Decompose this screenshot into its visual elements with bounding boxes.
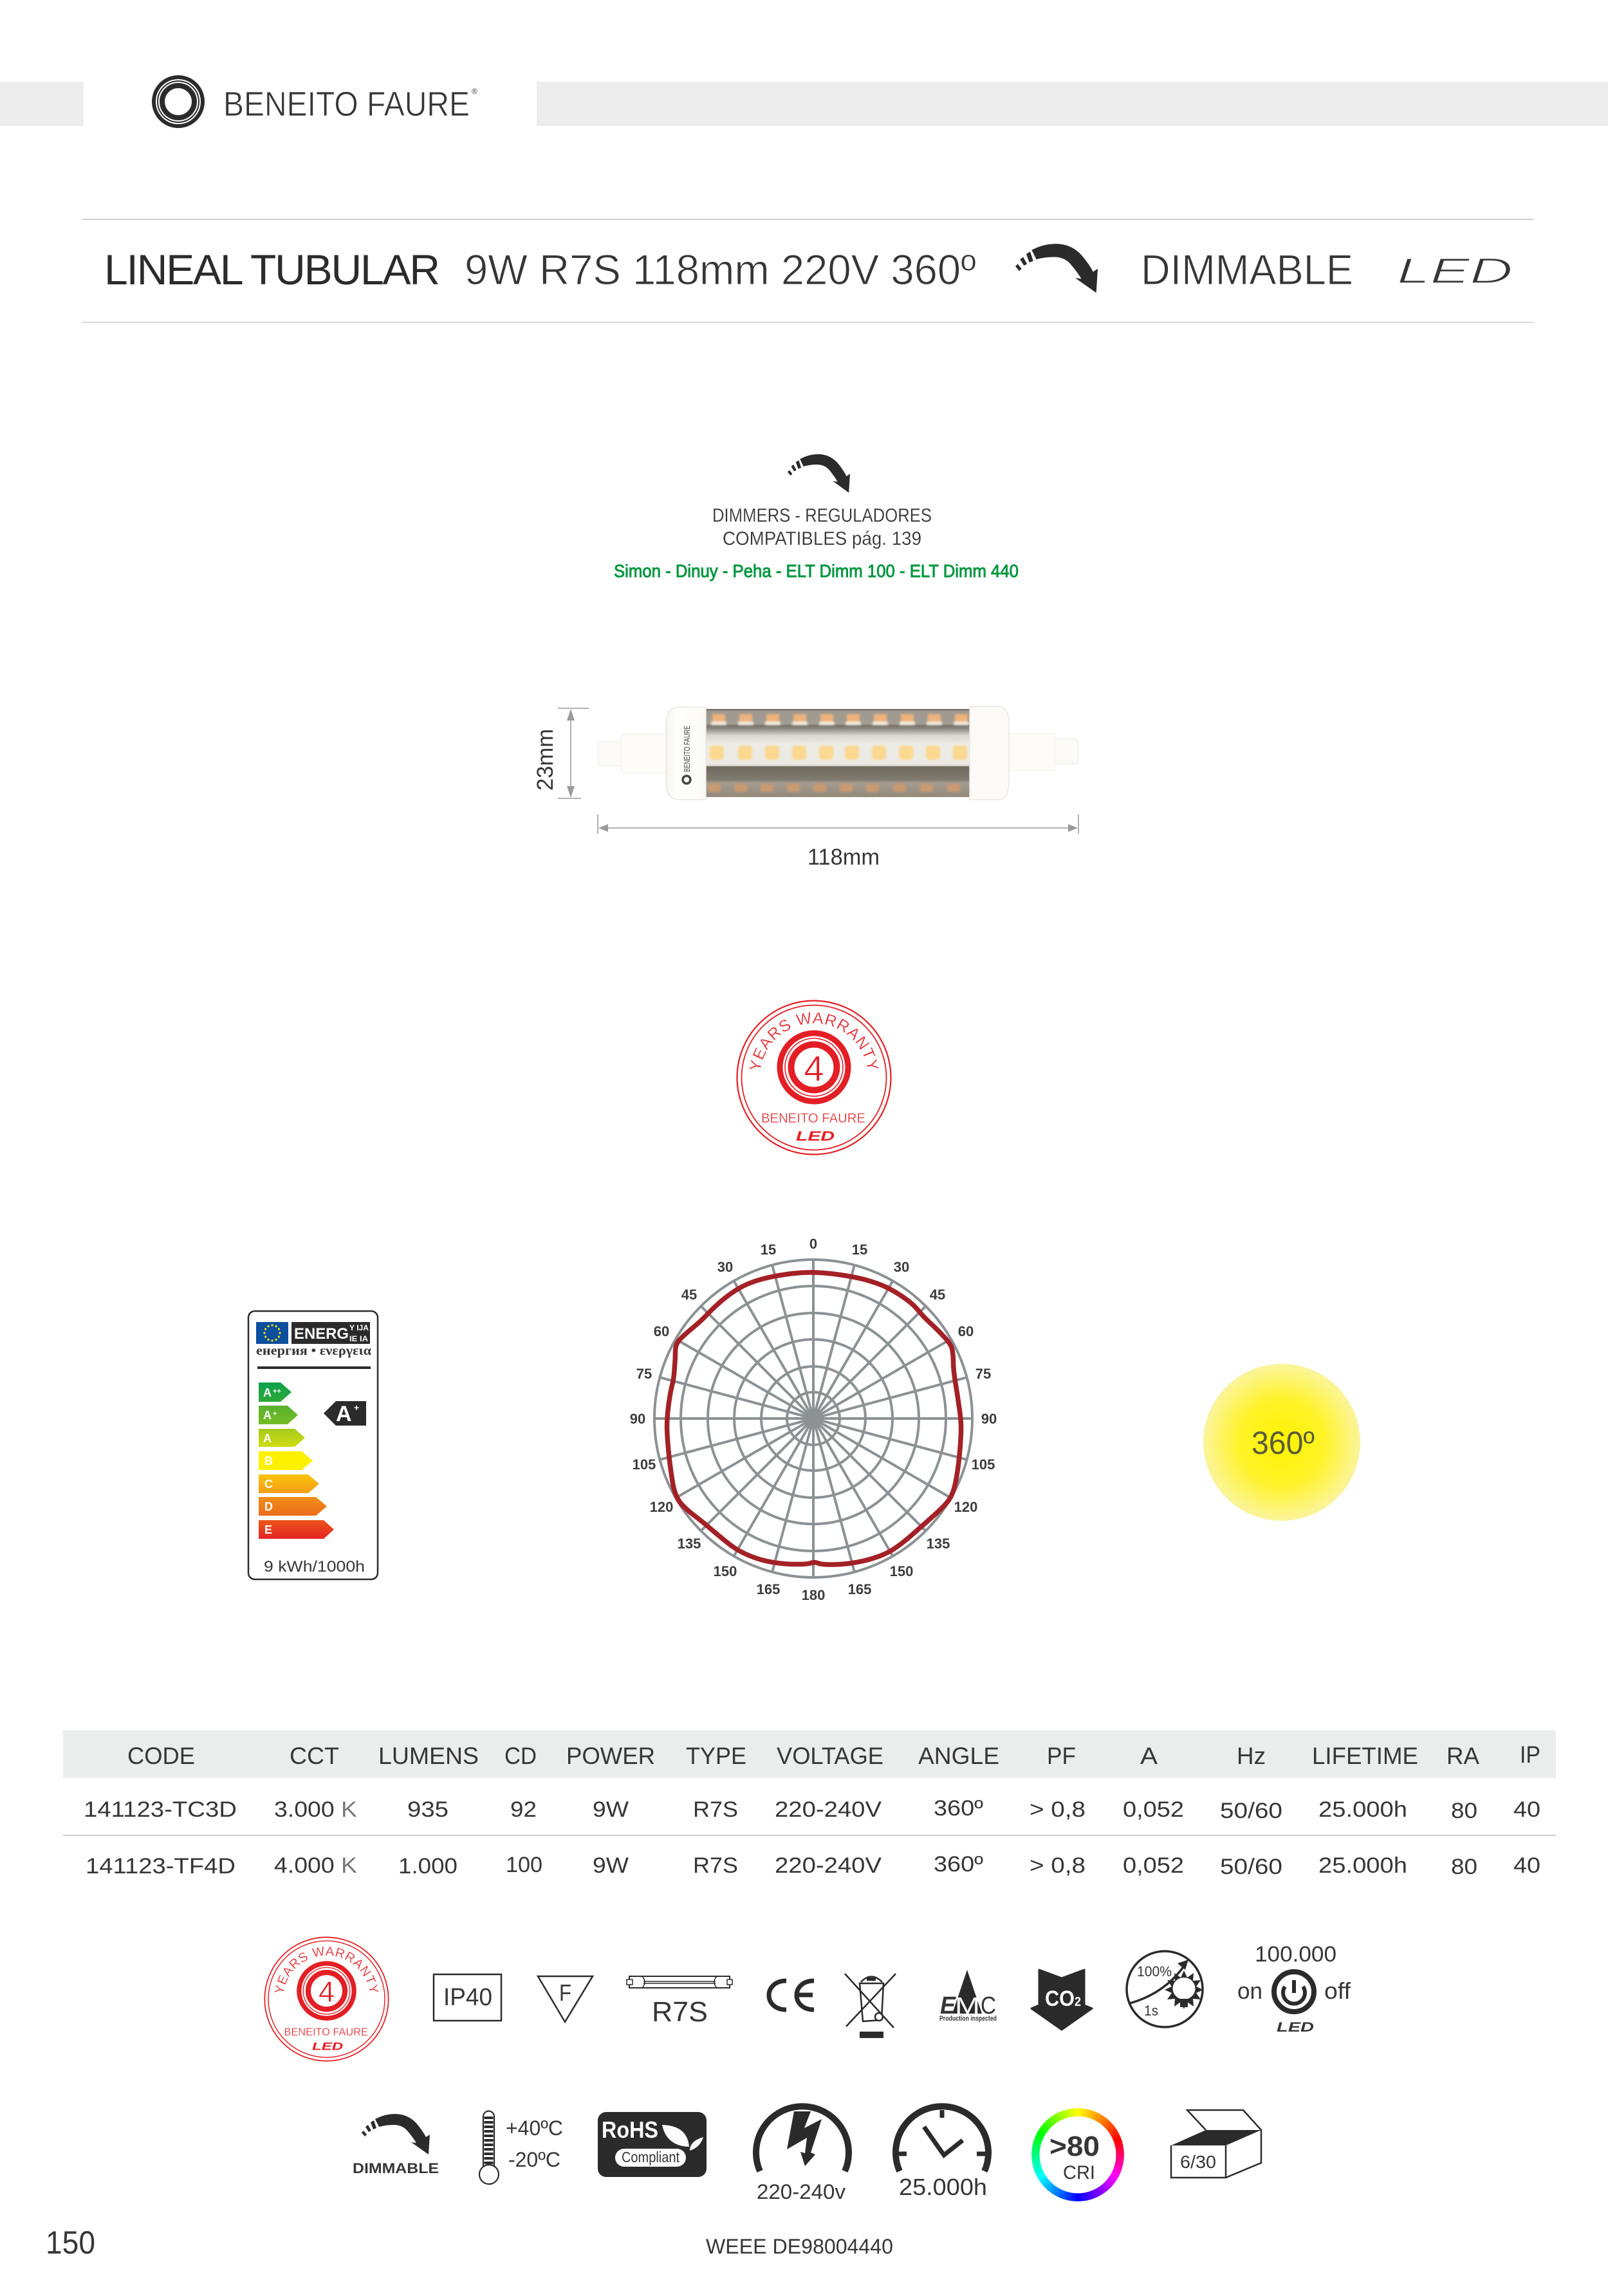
text: dimmers heading: DIMMERS - REGULADORES — [712, 505, 932, 526]
chart: polar light distribution: 90 — [981, 1411, 997, 1427]
title: dimmable: DIMMABLE — [1141, 246, 1353, 293]
icon: packaging box: 6/30 — [1180, 2152, 1216, 2172]
table: row 141123-TC3D: 40 — [1513, 1797, 1540, 1822]
chart: polar light distribution: 60 — [958, 1323, 974, 1339]
chart: polar light distribution: 0 — [809, 1236, 817, 1252]
table: row 141123-TF4D: R7S — [693, 1853, 738, 1878]
chart: polar light distribution: 120 — [650, 1499, 673, 1515]
panel: energy label: B — [264, 1455, 273, 1467]
panel: energy label: D — [264, 1500, 273, 1513]
header bar: right — [537, 82, 1608, 126]
icon: lifetime clock — [896, 2106, 989, 2200]
table: header band: RA — [1446, 1743, 1479, 1769]
table: header band: TYPE — [686, 1743, 746, 1769]
chart: polar light distribution: 15 — [852, 1242, 867, 1258]
icon: CO2 reduction arrow: CO2 — [1045, 1987, 1081, 2011]
text: compatible dimmers: Simon - Dinuy - Peha - ELT Dimm 100 - ELT Dimm 440 — [614, 561, 1019, 581]
chart: polar light distribution: 75 — [975, 1366, 991, 1382]
table: header band: LUMENS — [378, 1743, 479, 1769]
table: row 141123-TF4D: > 0,8 — [1030, 1853, 1086, 1878]
dimension: lamp height — [533, 708, 589, 798]
badge: 4 years warranty: 4 — [804, 1048, 824, 1088]
icon: dimmers arrow — [788, 454, 850, 493]
icon: dimmable arrow in title — [1015, 244, 1098, 293]
icon: instant start 100% in 1s: 100% — [1137, 1963, 1172, 1979]
panel: energy label: + — [354, 1402, 359, 1413]
table: header band — [63, 1731, 1556, 1778]
chart: polar light distribution: 45 — [930, 1287, 945, 1303]
table: row 141123-TC3D: 92 — [510, 1797, 537, 1822]
text: CRI value: CRI — [1063, 2162, 1095, 2183]
icon: IP40 box — [434, 1974, 501, 2021]
panel: energy label: E — [264, 1523, 272, 1536]
icon: WEEE crossed bin — [845, 1974, 896, 2038]
logo: Beneito Faure — [154, 77, 477, 126]
text: CRI value — [1049, 2131, 1100, 2183]
icon: 100.000 on off cycles: LED — [1277, 2020, 1314, 2035]
table: row 141123-TF4D: 4.000 K — [274, 1853, 357, 1878]
logo: Beneito Faure: BENEITO FAURE — [223, 85, 470, 124]
panel: energy label: C — [264, 1478, 273, 1491]
icon: 100.000 on off cycles: off — [1324, 1978, 1351, 2004]
chart: polar light distribution: 165 — [757, 1581, 780, 1597]
title: product family: LINEAL TUBULAR — [104, 246, 440, 293]
logo: LED in title: LED — [1397, 250, 1513, 291]
table: row 141123-TF4D: 25.000h — [1318, 1853, 1407, 1878]
dimension: lamp length: 118mm — [808, 845, 880, 870]
badge: 4 years warranty: LED — [796, 1129, 835, 1144]
icon: instant start 100% in 1s — [1127, 1951, 1203, 2027]
chart: polar light distribution: 30 — [894, 1259, 909, 1275]
chart: polar light distribution: 135 — [678, 1536, 701, 1552]
table: row 141123-TF4D: 0,052 — [1123, 1853, 1184, 1878]
table: row 141123-TF4D: 50/60 — [1220, 1855, 1282, 1879]
badge: warranty small — [264, 1936, 389, 2062]
text: WEEE registration: WEEE DE98004440 — [706, 2235, 893, 2258]
table: row 141123-TF4D: 1.000 — [398, 1854, 457, 1878]
table: row 141123-TF4D: 9W — [593, 1853, 629, 1878]
badge: warranty small: YEARS WARRANTY — [274, 1947, 378, 1993]
table: header band: A — [1140, 1743, 1158, 1769]
chart: polar light distribution: 45 — [681, 1287, 697, 1303]
icon: voltage gauge — [756, 2106, 849, 2203]
chart: polar light distribution: 180 — [802, 1587, 825, 1603]
icon: temperature range — [479, 2111, 563, 2184]
table: row 141123-TF4D: 141123-TF4D — [86, 1854, 236, 1878]
product photo: R7S LED lamp: BENEITO FAURE — [682, 726, 692, 772]
chart: polar light distribution: 150 — [890, 1563, 913, 1579]
table: row 141123-TC3D: 935 — [407, 1797, 448, 1822]
table: header band: ANGLE — [918, 1743, 999, 1769]
chart: polar light distribution: 105 — [972, 1456, 995, 1473]
table: header band: IP — [1520, 1741, 1540, 1768]
panel: energy label: енергия • ενεργεια — [256, 1344, 371, 1358]
table: header band: CCT — [290, 1743, 339, 1769]
table: header band: LIFETIME — [1312, 1743, 1418, 1769]
table: row 141123-TF4D: 100 — [506, 1853, 542, 1877]
page number: 150 — [46, 2225, 95, 2261]
icon: R7S tube: R7S — [652, 1996, 708, 2028]
panel: energy label: A — [263, 1432, 272, 1445]
panel: energy label: IE IA — [349, 1334, 368, 1343]
chart: polar light distribution: 90 — [630, 1411, 645, 1427]
icon: lifetime clock: 25.000h — [899, 2174, 987, 2200]
panel: energy label: 9 kWh/1000h — [264, 1558, 365, 1575]
icon: F mark triangle: F — [559, 1979, 571, 2006]
table: header band: CODE — [127, 1743, 195, 1769]
icon: EMC production inspected — [939, 1970, 997, 2023]
icon: EMC production inspected: E — [940, 1992, 957, 2019]
panel: energy label: ENERG — [294, 1325, 349, 1343]
title rule: top — [82, 219, 1533, 220]
table: row 141123-TC3D: 80 — [1451, 1799, 1477, 1823]
icon: instant start 100% in 1s: 1s — [1144, 2003, 1158, 2019]
text: CRI value: >80 — [1049, 2131, 1100, 2162]
header bar: left — [0, 82, 84, 126]
badge: warranty small: BENEITO FAURE — [284, 2026, 368, 2038]
chart: polar light distribution: 120 — [954, 1499, 977, 1515]
logo: Beneito Faure: ® — [472, 87, 477, 96]
badge: 4 years warranty — [736, 1000, 892, 1155]
table: row 141123-TF4D — [86, 1852, 1540, 1879]
dimension: lamp length — [598, 814, 1078, 870]
table: header band: POWER — [566, 1743, 655, 1769]
table: row 141123-TC3D: 141123-TC3D — [84, 1797, 237, 1822]
icon: dimmable — [353, 2114, 439, 2176]
icon: CO2 reduction arrow — [1031, 1970, 1092, 2030]
chart: polar light distribution: 75 — [636, 1366, 652, 1382]
icon: CE mark — [769, 1981, 814, 2010]
table: header band: CD — [504, 1743, 537, 1769]
icon: CRI colour ring — [1031, 2108, 1124, 2201]
panel: energy label: A — [263, 1409, 272, 1422]
icon: R7S tube — [627, 1976, 732, 2028]
table: header band: Hz — [1237, 1743, 1266, 1769]
icon: packaging box — [1171, 2110, 1261, 2178]
icon: RoHS compliant: Compliant — [622, 2149, 680, 2165]
icon: EMC production inspected: Production inspected — [939, 2015, 997, 2023]
panel: energy label: + — [273, 1410, 277, 1418]
text: dimmers heading: COMPATIBLES pág. 139 — [723, 528, 921, 549]
chart: polar light distribution: 165 — [848, 1581, 871, 1597]
title: product specs: 9W R7S 118mm 220V 360º — [465, 246, 976, 293]
product photo: R7S LED lamp — [598, 706, 1078, 800]
table: row 141123-TC3D: > 0,8 — [1030, 1797, 1086, 1822]
table: row 141123-TC3D: 360º — [934, 1796, 983, 1821]
badge: warranty small: LED — [312, 2040, 343, 2052]
title rule: bottom — [82, 322, 1533, 323]
icon: F mark triangle — [538, 1976, 593, 2022]
table: row 141123-TC3D: 25.000h — [1318, 1797, 1407, 1822]
chart: polar light distribution: 30 — [717, 1259, 733, 1275]
icon: temperature range: -20ºC — [508, 2148, 560, 2171]
panel: energy label: ++ — [273, 1388, 281, 1395]
table: row 141123-TC3D: 3.000 K — [274, 1797, 357, 1822]
chart: polar light distribution: 60 — [654, 1323, 669, 1339]
table: row 141123-TC3D: 50/60 — [1220, 1799, 1282, 1823]
badge: warranty small: 4 — [319, 1976, 335, 2008]
dimension: lamp height: 23mm — [533, 729, 558, 791]
panel: energy label: Y IJA — [349, 1323, 369, 1332]
panel: energy label: A — [336, 1402, 352, 1426]
icon: voltage gauge: 220-240v — [757, 2180, 846, 2203]
table: row divider — [63, 1835, 1556, 1836]
icon: RoHS compliant: RoHS — [602, 2117, 658, 2143]
icon: 100.000 on off cycles — [1237, 1942, 1351, 2035]
table: row 141123-TC3D: R7S — [693, 1797, 738, 1822]
icon: 100.000 on off cycles: on — [1237, 1978, 1262, 2004]
icon: 360 degree beam — [1203, 1364, 1360, 1521]
table: row 141123-TC3D: 0,052 — [1123, 1797, 1184, 1822]
table: row 141123-TF4D: 220-240V — [775, 1853, 882, 1878]
table: row 141123-TC3D — [84, 1796, 1540, 1823]
chart: polar light distribution — [630, 1236, 997, 1603]
table: row 141123-TF4D: 360º — [934, 1852, 983, 1877]
table: header band: PF — [1047, 1743, 1076, 1769]
chart: polar light distribution: 150 — [714, 1563, 737, 1579]
chart: polar light distribution: 15 — [761, 1242, 776, 1258]
icon: dimmable: DIMMABLE — [353, 2160, 439, 2176]
badge: 4 years warranty: YEARS WARRANTY — [749, 1012, 879, 1069]
text: dimmers heading — [712, 505, 932, 549]
panel: energy label: A — [263, 1386, 272, 1399]
table: row 141123-TF4D: 40 — [1513, 1853, 1540, 1878]
icon: 360 degree beam: 360º — [1252, 1425, 1315, 1461]
table: header band: VOLTAGE — [777, 1743, 883, 1769]
icon: EMC production inspected: M — [955, 1992, 980, 2019]
icon: RoHS compliant — [598, 2112, 707, 2177]
table: row 141123-TF4D: 80 — [1451, 1855, 1477, 1879]
icon: IP40 box: IP40 — [443, 1984, 492, 2011]
icon: temperature range: +40ºC — [506, 2117, 563, 2140]
panel: energy label — [248, 1311, 378, 1579]
chart: polar light distribution: 105 — [633, 1456, 656, 1473]
badge: 4 years warranty: BENEITO FAURE — [761, 1111, 865, 1126]
icon: 100.000 on off cycles: 100.000 — [1255, 1942, 1336, 1967]
table: row 141123-TC3D: 9W — [593, 1797, 629, 1822]
chart: polar light distribution: 135 — [927, 1536, 950, 1552]
table: row 141123-TC3D: 220-240V — [775, 1797, 882, 1822]
icon: EMC production inspected: C — [981, 1992, 996, 2019]
